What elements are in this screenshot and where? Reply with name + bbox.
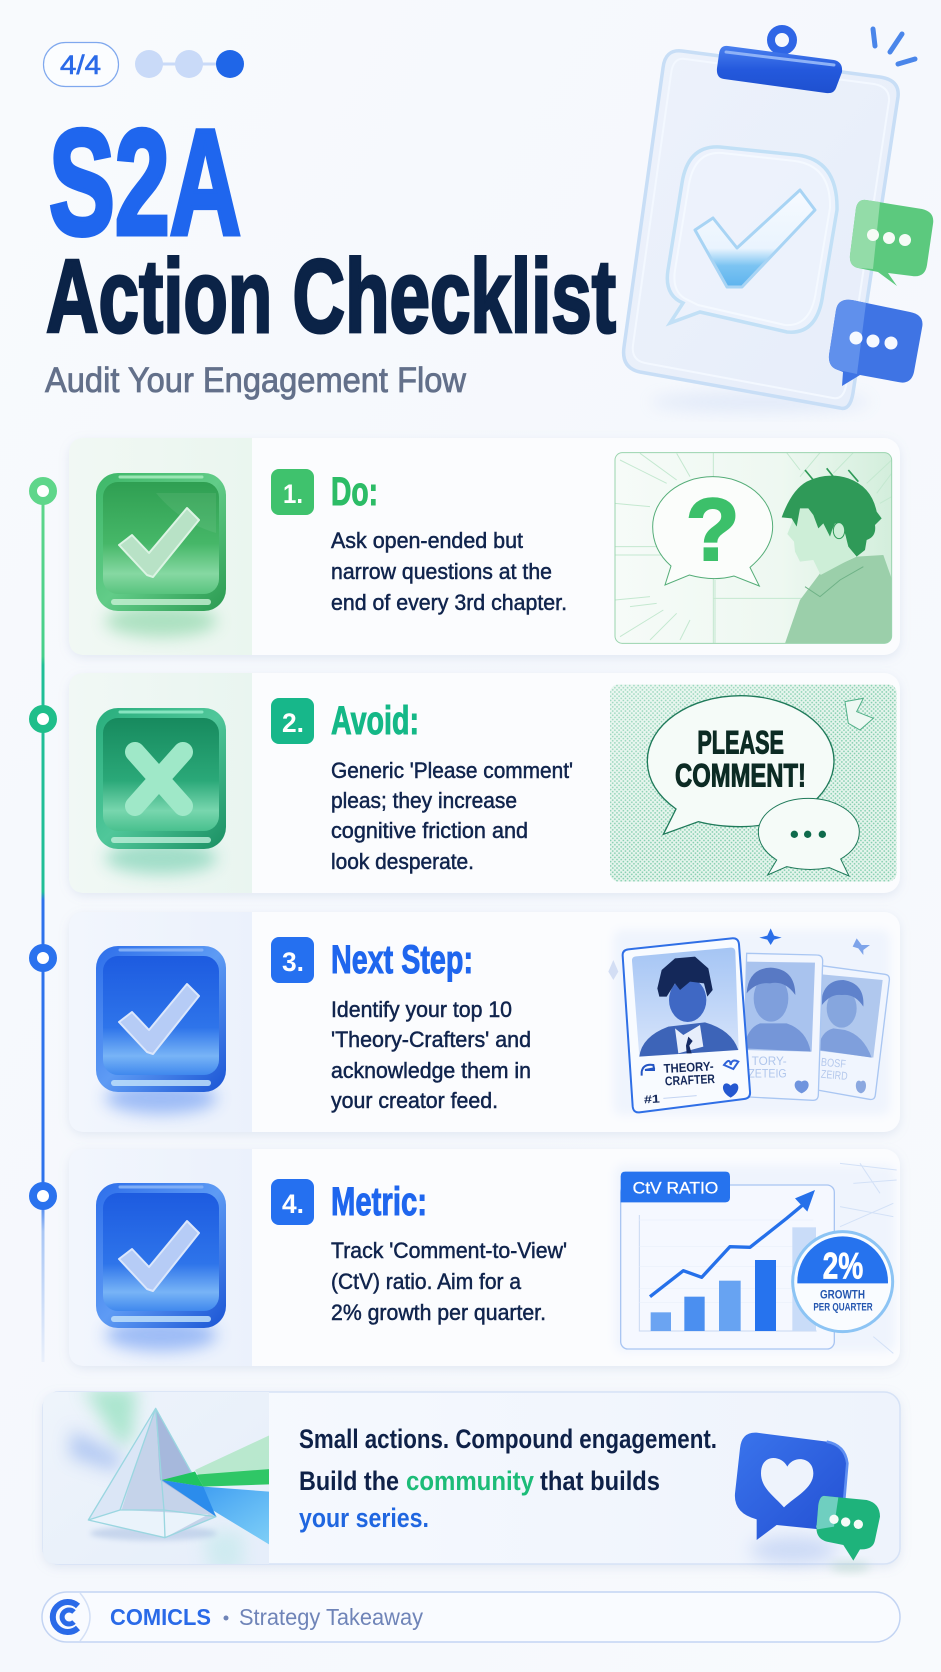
- number badge 2: 2.: [282, 708, 304, 738]
- glass check mark: [695, 190, 815, 287]
- chart: CtV ratio growth: [615, 1163, 897, 1353]
- title: [46, 98, 616, 355]
- card caption: THEORY-: [663, 1059, 714, 1076]
- body text: pleas; they increase: [331, 788, 517, 813]
- rays: [195, 1436, 269, 1475]
- number badge 2: [271, 698, 314, 744]
- body text: Identify your top 10: [331, 997, 512, 1022]
- green chat bubble: [850, 200, 933, 286]
- icon: blue glass check: [96, 946, 226, 1114]
- blue chat bubble: [829, 300, 922, 386]
- body text: look desperate.: [331, 849, 474, 874]
- body text: (CtV) ratio. Aim for a: [331, 1269, 522, 1294]
- gridlines and axis: [639, 1215, 817, 1331]
- timeline node 2: [33, 709, 53, 729]
- hero icon: glass clipboard with chat bubbles: [624, 29, 933, 412]
- number badge 3: 3.: [282, 947, 304, 977]
- card caption: #1: [644, 1094, 660, 1106]
- back card 2: ZETEIG: [748, 1067, 787, 1081]
- number badge 1: [271, 469, 314, 515]
- closing message: your series.: [299, 1503, 429, 1533]
- green bubble: [816, 1496, 880, 1561]
- closing message: community: [406, 1466, 534, 1496]
- number badge 3: [271, 937, 314, 983]
- footer bar: [42, 1592, 900, 1642]
- illustration: please comment bubbles: PLEASE: [697, 724, 784, 760]
- body text: narrow questions at the: [331, 559, 552, 584]
- panel: step 2 Avoid: [69, 673, 900, 893]
- heading: Metric: Metric:: [331, 1180, 427, 1224]
- chart card: [621, 1185, 834, 1349]
- growth badge: [793, 1232, 893, 1332]
- brand name: COMICLS: [110, 1604, 211, 1630]
- progress dots: [135, 50, 244, 78]
- body text: [331, 1238, 567, 1325]
- panel: step 4 Metric: [69, 1149, 900, 1366]
- panel: step 1 Do: [69, 438, 900, 655]
- back card 3: [807, 966, 889, 1099]
- timeline: [33, 481, 53, 1362]
- body text: Ask open-ended but: [331, 528, 523, 553]
- body text: [331, 758, 573, 874]
- body text: Generic 'Please comment': [331, 758, 573, 783]
- body text: [331, 528, 567, 615]
- card caption: CRAFTER: [665, 1072, 715, 1089]
- timeline node 3: [33, 948, 53, 968]
- logo: [53, 1602, 78, 1632]
- growth arrow: [650, 1190, 815, 1297]
- body text: 2% growth per quarter.: [331, 1300, 546, 1325]
- card caption: [642, 1059, 716, 1106]
- body text: acknowledge them in: [331, 1058, 531, 1083]
- timeline node 4: [33, 1186, 53, 1206]
- number badge 4: [271, 1179, 314, 1225]
- blue bubble: [735, 1433, 847, 1540]
- boy face: [787, 507, 855, 575]
- step pill: [44, 42, 118, 86]
- prism body: [122, 1412, 214, 1529]
- small bubble: [758, 798, 859, 876]
- icon: blue glass check: [96, 1183, 226, 1351]
- icon: glass prism with light rays: [43, 1388, 270, 1572]
- illustration: manga boy with question bubble: [613, 453, 893, 643]
- icon: green glass check: [96, 473, 226, 637]
- illustration: please comment bubbles: [610, 684, 897, 882]
- closing message: Small actions. Compound engagement.: [299, 1424, 717, 1454]
- large bubble: [647, 696, 834, 834]
- back card 3: ZEIRD: [820, 1069, 848, 1083]
- body text: end of every 3rd chapter.: [331, 590, 567, 615]
- heading: Avoid: Avoid:: [331, 699, 419, 743]
- bars: [651, 1227, 816, 1331]
- icon: teal glass cross: [96, 708, 226, 874]
- illustration: please comment bubbles: COMMENT!: [675, 758, 806, 794]
- chart label: CtV RATIO: [633, 1178, 718, 1197]
- closing message: that builds: [540, 1466, 660, 1496]
- sparkle marks: [873, 29, 915, 64]
- body text: your creator feed.: [331, 1088, 498, 1113]
- illustration: manga boy with question bubble: ?: [686, 480, 740, 579]
- timeline node 1: [33, 481, 53, 501]
- body text: Track 'Comment-to-View': [331, 1238, 567, 1263]
- subtitle: Audit Your Engagement Flow: [45, 361, 467, 400]
- question bubble: [653, 477, 773, 586]
- body text: 'Theory-Crafters' and: [331, 1027, 531, 1052]
- clipboard clip: [717, 29, 842, 93]
- step pill: 4/4: [60, 50, 101, 80]
- panel: step 3 Next Step: [69, 912, 900, 1132]
- number badge 4: 4.: [282, 1189, 304, 1219]
- heading: Next Step: Next Step:: [331, 938, 473, 982]
- body text: cognitive friction and: [331, 818, 528, 843]
- footer tagline: Strategy Takeaway: [239, 1604, 423, 1630]
- growth badge: GROWTH: [820, 1287, 865, 1301]
- heading: Do: Do:: [331, 470, 378, 514]
- back card 2: TORY-: [752, 1054, 787, 1068]
- panel: closing takeaway: [43, 1388, 900, 1572]
- progress indicator: [44, 42, 244, 86]
- title line: Action Checklist: Action Checklist: [46, 239, 616, 355]
- growth badge: PER QUARTER: [813, 1302, 873, 1314]
- front card: [623, 938, 750, 1112]
- title line: S2A: S2A: [49, 98, 241, 266]
- boy hair: [782, 476, 882, 557]
- glass speech bubble: [667, 147, 837, 332]
- clipboard board: [624, 51, 898, 408]
- icon: heart and chat bubbles: [735, 1433, 880, 1572]
- separator dot: [224, 1616, 228, 1620]
- closing message: Build the: [299, 1466, 399, 1496]
- back card 2: [743, 953, 823, 1100]
- heart: [761, 1458, 813, 1507]
- illustration: theory-crafter trading cards: [608, 928, 890, 1115]
- person portrait: [639, 1022, 738, 1057]
- chart label: [621, 1172, 730, 1202]
- back card 3: BOSF: [820, 1057, 846, 1071]
- growth badge: 2%: [823, 1244, 863, 1286]
- number badge 1: 1.: [283, 479, 303, 509]
- closing message: [299, 1424, 717, 1533]
- boy hoodie: [785, 555, 893, 643]
- body text: [331, 997, 531, 1113]
